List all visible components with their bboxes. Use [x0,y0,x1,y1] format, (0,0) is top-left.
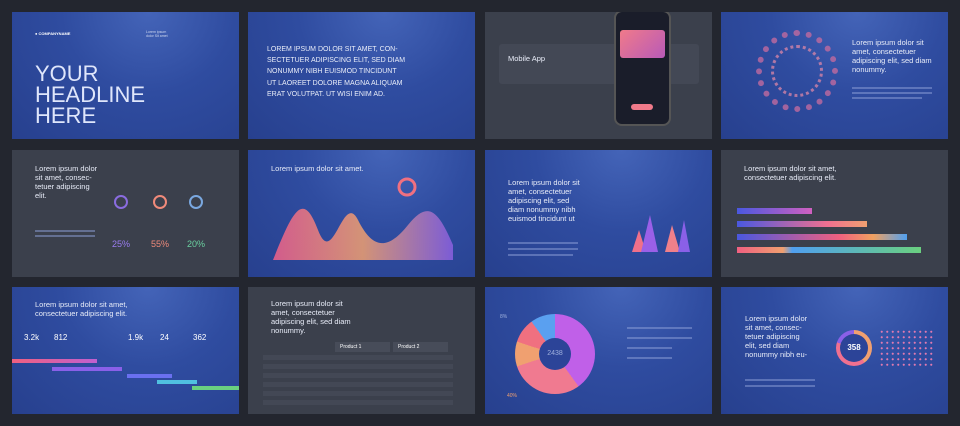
heading: amet, consectetuer [852,47,916,56]
triangle chart [632,215,690,252]
heading [745,314,807,359]
slide 5: donuts [12,150,239,277]
heading: adipiscing elit, sed diam [852,56,932,65]
heading: diam nonummy nibh [508,205,576,214]
heading: Lorem ipsum dolor sit amet, [35,300,128,309]
logo: ● COMPANYNAME [35,31,70,36]
wave chart [273,178,453,260]
table [335,342,390,352]
slide 8: bar chart [721,150,948,277]
headline: HEADLINE [35,82,145,107]
donut [836,330,872,366]
slide 10: table [248,287,475,414]
heading: adipiscing elit, sed [508,196,569,205]
slide 4: particle circle [721,12,948,139]
heading: Lorem ipsum dolor sit amet, [744,164,837,173]
heading: amet, consectetuer [271,308,335,317]
heading: consectetuer adipiscing elit. [744,173,836,182]
slide 12: donut 358: 358 [847,343,861,352]
heading: nonummy. [271,326,305,335]
heading: nonummy. [852,65,886,74]
subtitle: dolor Sit amet [146,34,168,38]
radial chart [515,314,595,394]
heading: Lorem ipsum dolor sit [271,299,343,308]
heading [744,164,837,182]
slide 5: donuts: 55% [151,239,169,249]
headline [35,61,145,128]
heading: amet, consectetuer [508,187,572,196]
heading: sit amet, consec- [745,323,802,332]
heading: adipiscing elit, sed diam [271,317,351,326]
slide 9: timeline bars: 812 [54,333,67,342]
slide 11: radial chart: 40% [507,393,517,399]
subtitle: Lorem ipsum [146,30,166,34]
legend lines [627,327,692,328]
label: Mobile App [508,54,545,63]
paragraph: UT LAOREET DOLORE MAGNA ALIQUAM [267,80,402,87]
heading: euismod tincidunt ut [508,214,575,223]
values: 3.2k [24,333,39,342]
heading [508,178,580,223]
paragraph: NONUMMY NIBH EUISMOD TINCIDUNT [267,68,397,75]
bars [12,359,97,363]
bars [737,208,812,214]
paragraph: SECTETUER ADIPISCING ELIT, SED DIAM [267,57,405,64]
slide 1: headline [12,12,239,139]
slide 6: wave chart [248,150,475,277]
subtitle [146,30,168,38]
paragraph [267,46,405,98]
phone [614,10,671,126]
slide 10: table: Product 2 [398,344,419,350]
donut 3 [189,195,203,209]
heading: tetuer adipiscing [745,332,800,341]
slide 11: radial chart: 2438 [547,350,563,357]
heading: tetuer adipiscing [35,182,90,191]
small text [852,87,932,88]
slide 9: timeline bars: 1.9k [128,333,143,342]
heading: elit. [35,191,47,200]
heading [271,299,351,335]
slide 7: triangle chart [485,150,712,277]
donut 2 [153,195,167,209]
heading: Lorem ipsum dolor [745,314,807,323]
slide 2: text [248,12,475,139]
slide 11: radial chart: 8% [500,314,507,320]
heading: Lorem ipsum dolor [35,164,97,173]
paragraph: LOREM IPSUM DOLOR SIT AMET, CON- [267,46,398,53]
slide 3: mobile app [485,12,712,139]
heading: Lorem ipsum dolor sit [508,178,580,187]
headline: YOUR [35,61,99,86]
heading [852,38,932,74]
slide 9: timeline bars: 362 [193,333,206,342]
heading: Lorem ipsum dolor sit [852,38,924,47]
heading: consectetuer adipiscing elit. [35,309,127,318]
slide 9: timeline bars [12,287,239,414]
donut 1 [114,195,128,209]
slide 5: donuts: 20% [187,239,205,249]
slide 11: radial chart [485,287,712,414]
paragraph: ERAT VOLUTPAT. UT WISI ENIM AD. [267,91,385,98]
heading: sit amet, consec- [35,173,92,182]
table: Product 1 [340,344,361,350]
slide 12: donut 358 [721,287,948,414]
heading: nonummy nibh eu- [745,350,807,359]
slide 5: donuts: 25% [112,239,130,249]
particle ring [756,30,838,112]
heading: Lorem ipsum dolor sit amet. [271,164,364,173]
dot grid [879,329,934,367]
heading: elit, sed diam [745,341,789,350]
heading [35,164,97,200]
slide 9: timeline bars: 24 [160,333,169,342]
card [499,44,699,84]
headline: HERE [35,103,96,128]
heading [35,300,128,318]
